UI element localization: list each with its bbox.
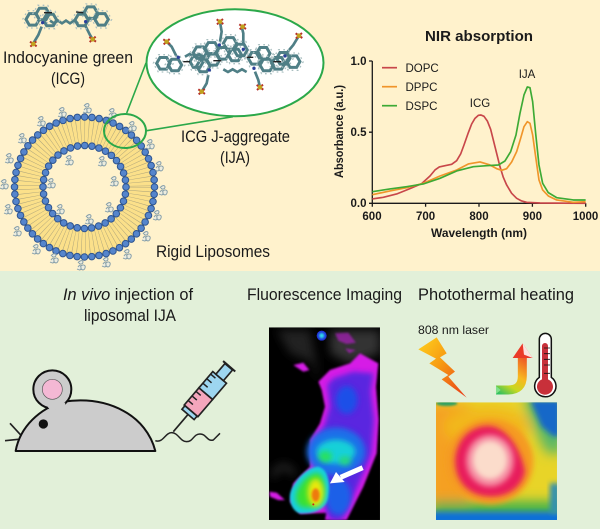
icon: heating arrow xyxy=(496,343,533,394)
icon: syringe xyxy=(166,360,236,437)
x axis label: Wavelength (nm) xyxy=(431,228,527,240)
curves xyxy=(372,87,586,203)
arrow xyxy=(330,468,363,483)
icon: ICG molecule xyxy=(23,4,112,47)
chart: NIR absorption: 0.0 xyxy=(350,198,366,210)
chart: NIR absorption: 600 xyxy=(362,211,382,223)
label: 808 nm laser: 808 nm laser xyxy=(418,323,489,337)
heading: Photothermal heating: Photothermal heating xyxy=(418,286,574,304)
y axis label: Absorbance (a.u.) xyxy=(334,85,346,178)
legend: DSPC xyxy=(406,101,437,113)
chart: NIR absorption: 900 xyxy=(523,211,542,223)
chart: NIR absorption: 1000 xyxy=(573,211,598,223)
panel: top background xyxy=(0,0,600,271)
heading: IJA: (IJA) xyxy=(220,149,250,167)
image: fluorescence imaging xyxy=(269,327,380,520)
group: laser and heating icons xyxy=(418,333,556,398)
icon: IJA molecule xyxy=(153,19,303,94)
heading: liposomal IJA: liposomal IJA xyxy=(84,307,176,325)
icon: thermometer xyxy=(535,333,556,397)
image: thermal map xyxy=(436,402,557,520)
heading: Rigid Liposomes: Rigid Liposomes xyxy=(156,243,270,261)
peak label IJA: IJA xyxy=(519,69,536,81)
diagram: liposome xyxy=(0,104,167,270)
heading: Indocyanine green: Indocyanine green xyxy=(3,49,133,67)
chart: NIR absorption: 1.0 xyxy=(350,56,366,68)
peak label ICG: ICG xyxy=(470,98,490,110)
panel: bottom background xyxy=(0,271,600,529)
legend: DPPC xyxy=(406,82,437,94)
chart: NIR absorption: 700 xyxy=(416,211,435,223)
icon: lightning xyxy=(418,337,467,398)
chart: NIR absorption xyxy=(334,28,598,240)
heading: ICG J-aggregate: ICG J-aggregate xyxy=(181,128,290,146)
heading: in vivo injection: In vivo injection of xyxy=(63,286,193,304)
legend: DOPC xyxy=(406,63,439,75)
chart: NIR absorption: 0.5 xyxy=(350,127,367,139)
heading: Fluorescence Imaging: Fluorescence Imaging xyxy=(247,286,402,304)
icon: mouse xyxy=(5,360,236,451)
callout: magnified IJA lens xyxy=(104,9,324,148)
chart: NIR absorption: 800 xyxy=(469,211,489,223)
chart title: NIR absorption xyxy=(425,28,533,45)
heading: ICG: (ICG) xyxy=(51,70,85,88)
legend xyxy=(382,63,439,113)
